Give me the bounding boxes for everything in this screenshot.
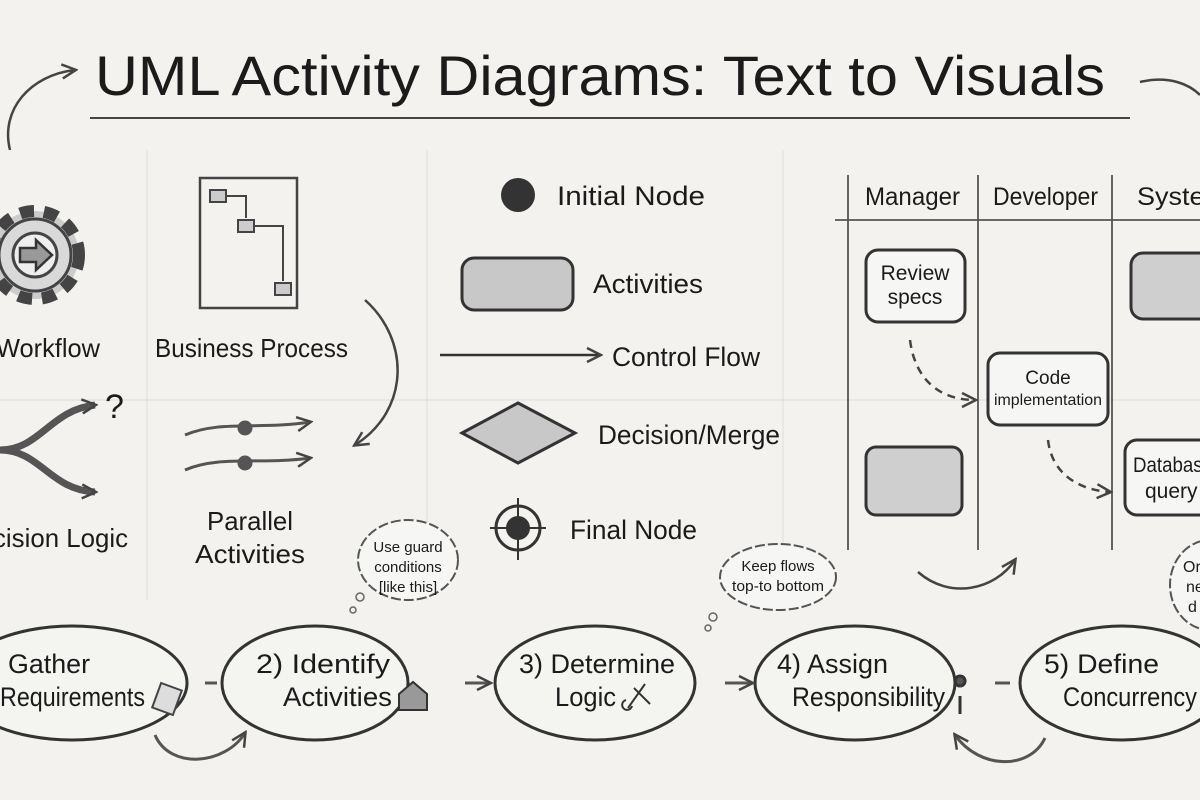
arrow: title top-right [1140, 80, 1200, 95]
box: database query [1125, 440, 1200, 515]
step 1 [0, 626, 187, 740]
label: Parallel Activities: Activities [195, 539, 305, 569]
callout: right: d [1188, 599, 1197, 616]
swimlanes: Manager [865, 183, 960, 211]
callout: keep flows: top-to bottom [732, 578, 824, 595]
box: review specs: Review [881, 262, 950, 285]
legend [440, 178, 780, 560]
step 3: 3) Determine [519, 649, 675, 679]
callout: guard conditions: conditions [374, 559, 442, 576]
step 4: 4) Assign [777, 649, 888, 679]
legend: final node [490, 498, 697, 560]
legend: activities [462, 258, 703, 310]
arrow: curved [355, 300, 398, 445]
callout: keep flows [705, 544, 836, 631]
step 5 [1020, 626, 1200, 740]
box: code implementation [988, 353, 1108, 425]
icon: note [152, 683, 182, 715]
legend: decision: Decision/Merge [598, 420, 780, 450]
box: code implementation: Code [1025, 368, 1071, 389]
icon: business process [200, 178, 297, 308]
swimlanes: Developer [993, 183, 1098, 211]
step 2: 2) Identify [256, 649, 391, 679]
step 5: 5) Define [1044, 649, 1159, 679]
icon: gear [0, 211, 79, 299]
box: code implementation: implementation [994, 392, 1102, 409]
callout: keep flows: Keep flows [741, 558, 815, 575]
box: review specs: specs [888, 286, 942, 309]
label: Parallel Activities: Parallel [207, 506, 293, 536]
arrow: title top-left [8, 70, 75, 150]
legend: initial node [501, 178, 705, 212]
box: review specs [866, 250, 965, 322]
legend: decision [462, 403, 780, 463]
callout: right [1170, 540, 1200, 630]
swimlanes [835, 175, 1200, 589]
arrows between steps [155, 683, 1045, 762]
callout: guard conditions: Use guard [373, 539, 443, 556]
label: Business Process: Business Process [155, 333, 348, 363]
icon: parallel activities [185, 422, 310, 470]
legend: control flow: Control Flow [612, 342, 760, 372]
step 3 [495, 626, 695, 740]
callout: guard conditions [350, 520, 458, 613]
icon: pin [955, 676, 965, 714]
legend: final node: Final Node [570, 515, 697, 545]
icon: pick [622, 684, 650, 710]
step 2: Activities [283, 682, 392, 712]
icon: house [399, 682, 427, 710]
step 3: Logic [555, 682, 616, 712]
legend: activities: Activities [593, 269, 703, 299]
legend: initial node: Initial Node [557, 181, 705, 211]
step 4 [755, 626, 965, 740]
title: UML Activity Diagrams: Text to Visuals [95, 44, 1105, 107]
step 4: Responsibility [792, 682, 945, 712]
process steps [0, 626, 1200, 762]
box: database query: query [1145, 480, 1198, 503]
icon: decision logic [0, 388, 124, 492]
label: Parallel Activities [195, 506, 305, 569]
step 2 [222, 626, 427, 740]
icon: decision logic: ? [105, 388, 124, 426]
step 1: Requirements [0, 682, 145, 712]
callout: guard conditions: [like this] [379, 579, 437, 596]
step 1: Gather [8, 649, 90, 679]
